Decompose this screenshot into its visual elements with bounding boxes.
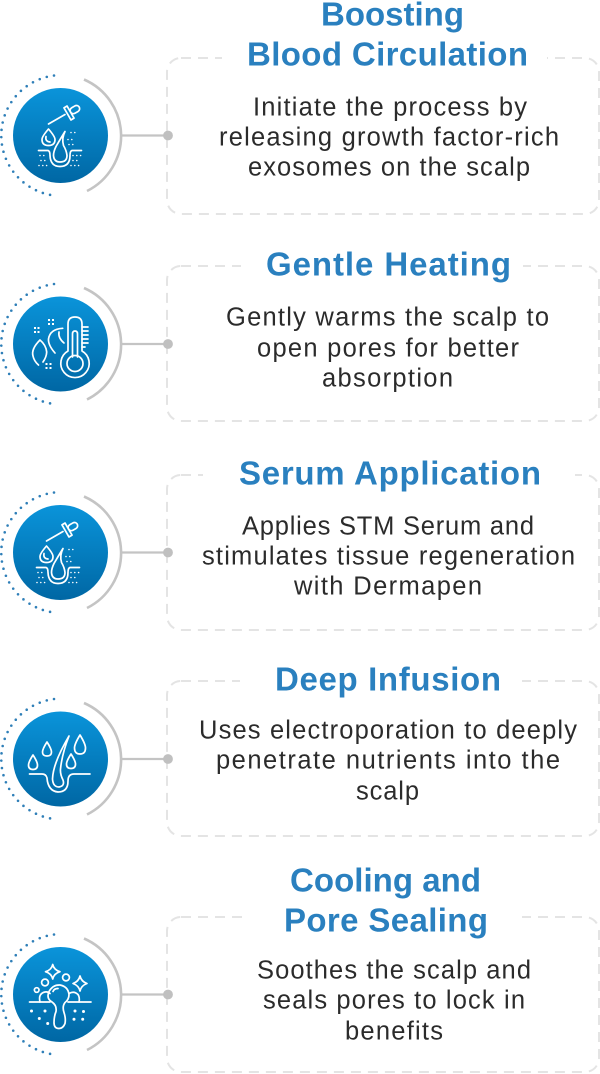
panel: step 4 dashed box: [167, 681, 599, 836]
text: step 4 description: Uses electroporation to deeply: [199, 716, 577, 744]
step 2: gentle heating: [1, 246, 599, 421]
text: step 4 description: [199, 716, 577, 806]
panel: step 2 dashed box: [167, 266, 599, 421]
text: step 2 description: [226, 304, 549, 392]
panel: step 3 dashed box: [167, 475, 599, 630]
text: step 5 description: seals pores to lock in: [263, 986, 525, 1014]
text: step 2 description: open pores for better: [257, 334, 520, 362]
panel: step 1 dashed box: [167, 58, 599, 214]
text: step 1 description: releasing growth factor-rich: [219, 124, 559, 152]
heading: step 5: Pore Sealing: [284, 902, 488, 938]
panel: step 5 dashed box: [167, 917, 599, 1072]
text: step 5 description: Soothes the scalp and: [257, 956, 531, 984]
icon: step 1 badge with dropper and follicle: [1, 76, 173, 196]
text: step 2 description: absorption: [322, 364, 453, 392]
icon: step 4 badge with hair and drops: [1, 699, 173, 819]
text: step 2 description: Gently warms the scalp to: [226, 304, 549, 332]
text: step 5 description: [257, 956, 531, 1046]
text: step 3 description: [202, 512, 575, 600]
text: step 4 description: penetrate nutrients into the: [216, 746, 560, 774]
text: step 1 description: Initiate the process by: [253, 94, 527, 122]
step 1: boosting blood circulation: [1, 0, 599, 214]
icon: step 3 badge with dropper and follicle: [1, 492, 173, 612]
icon: step 5 badge with sealed pore and sparkles: [1, 934, 173, 1054]
step 4: deep infusion: [1, 660, 599, 836]
text: step 4 description: scalp: [356, 778, 419, 806]
icon: step 2 badge with thermometer and flames: [1, 284, 173, 404]
step 3: serum application: [1, 454, 599, 630]
heading: step 1: Blood Circulation: [247, 36, 528, 72]
heading: step 1: [247, 0, 528, 72]
text: step 3 description: Applies STM Serum and: [242, 512, 534, 540]
text: step 5 description: benefits: [345, 1018, 443, 1046]
heading: step 3: Serum Application: [239, 454, 541, 492]
text: step 3 description: stimulates tissue regeneration: [202, 542, 575, 570]
text: step 3 description: with Dermapen: [293, 572, 482, 600]
heading: step 5: [284, 862, 488, 938]
text: step 1 description: [219, 94, 559, 182]
heading: step 5: Cooling and: [290, 862, 481, 898]
heading: step 2: Gentle Heating: [266, 246, 511, 282]
heading: step 4: Deep Infusion: [275, 660, 501, 698]
step 5: cooling and pore sealing: [1, 862, 599, 1072]
text: step 1 description: exosomes on the scalp: [248, 154, 530, 182]
